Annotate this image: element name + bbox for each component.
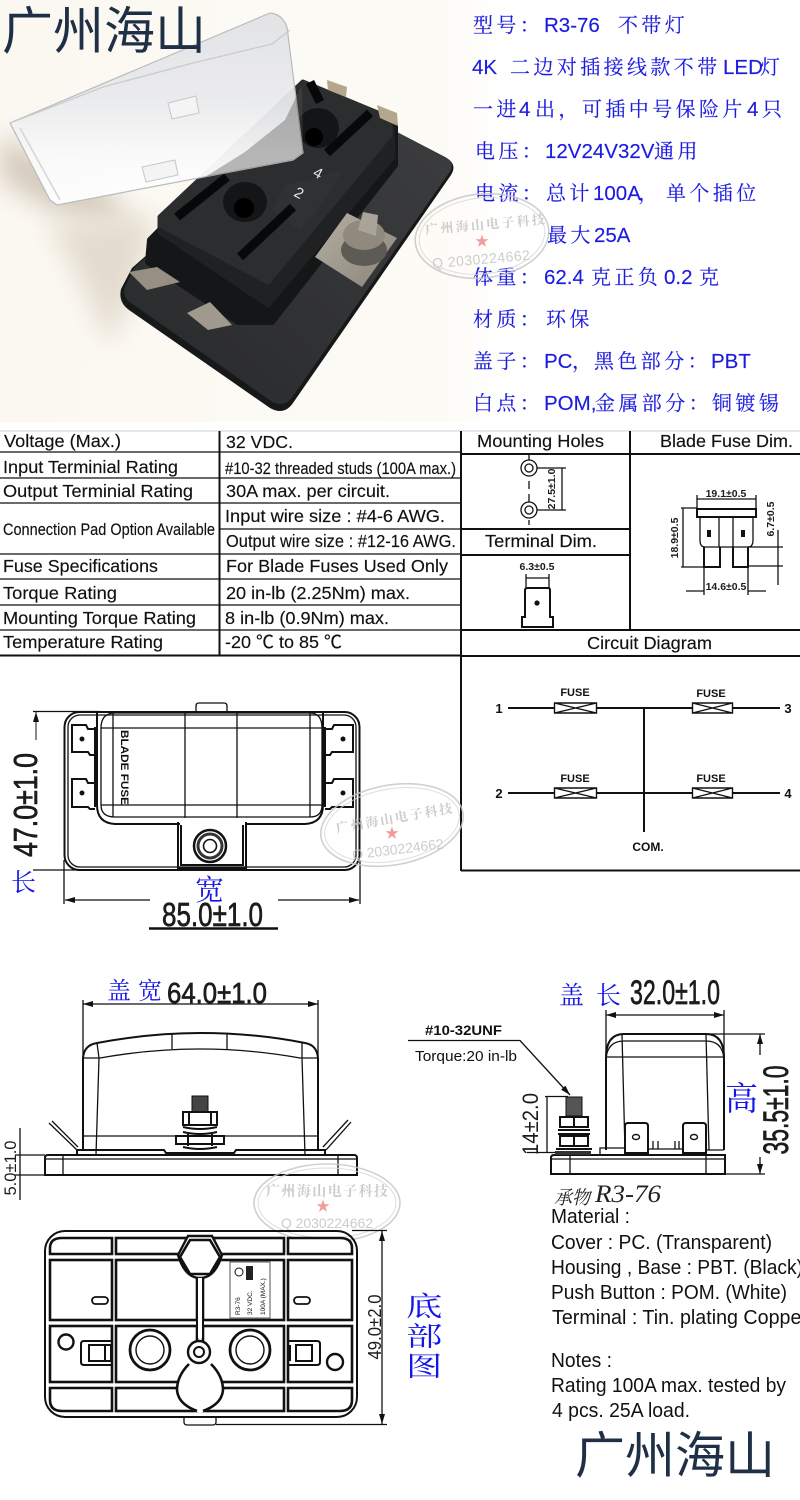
side view labels and dimensions: 高 bbox=[725, 1081, 758, 1118]
product specification text: PC bbox=[544, 350, 573, 373]
materials and notes bbox=[551, 1206, 800, 1422]
front view dimensions: 5.0±1.0 bbox=[1, 1140, 20, 1196]
mounting holes diagram: 27.5±1.0 bbox=[546, 468, 558, 509]
product specification text: 黑色部分： bbox=[594, 350, 711, 373]
front view drawing bbox=[45, 1033, 357, 1175]
product specification text: 62.4 bbox=[544, 266, 584, 289]
product specification text: 铜镀锡 bbox=[712, 392, 782, 415]
stud box bbox=[178, 822, 246, 868]
stud callout bbox=[408, 1022, 570, 1095]
right column values: Input wire size : #4-6 AWG. bbox=[225, 506, 445, 526]
right column values: -20 ℃ to 85 ℃ bbox=[225, 632, 342, 652]
stud callout: #10-32UNF bbox=[425, 1022, 502, 1038]
fuse slots and mounting holes bbox=[177, 82, 370, 257]
left column labels bbox=[3, 431, 215, 652]
top view dimensions: 宽 bbox=[195, 874, 224, 907]
handwritten model note: R3-76 bbox=[594, 1181, 662, 1208]
table headers right: Blade Fuse Dim. bbox=[660, 431, 793, 451]
blade fuse dimension diagram: 14.6±0.5 bbox=[706, 581, 747, 593]
materials and notes: Notes : bbox=[551, 1350, 612, 1372]
product specification text: 金属部分： bbox=[595, 392, 712, 415]
product specification text: 100A bbox=[593, 182, 641, 205]
right column values bbox=[225, 432, 456, 652]
blade fuse dimension diagram: 19.1±0.5 bbox=[706, 488, 747, 500]
transparent cover bbox=[10, 13, 303, 205]
terminals bbox=[72, 725, 353, 809]
circuit labels: 4 bbox=[784, 786, 792, 801]
blade fuse dimension diagram: 6.7±0.5 bbox=[765, 501, 777, 536]
left column labels: Mounting Torque Rating bbox=[3, 608, 196, 628]
front view dimensions: 64.0±1.0 bbox=[167, 978, 267, 1010]
spade terminals bbox=[129, 267, 180, 290]
rating label: 32 VDC. bbox=[247, 1290, 254, 1315]
brand title bottom: 广州海山 bbox=[575, 1428, 775, 1484]
product specification text: 12V24V32V bbox=[545, 140, 655, 163]
materials and notes: Cover : PC. (Transparent) bbox=[551, 1232, 772, 1254]
left column labels: Connection Pad Option Available bbox=[3, 521, 215, 539]
terminal dimension diagram: 6.3±0.5 bbox=[520, 561, 555, 573]
side view labels and dimensions: 盖长 bbox=[559, 982, 621, 1010]
bottom view drawing bbox=[45, 1231, 357, 1425]
base bbox=[45, 1155, 357, 1175]
circuit labels: FUSE bbox=[560, 687, 590, 699]
circuit numbers: 2 bbox=[291, 184, 306, 203]
right column values: 30A max. per circuit. bbox=[226, 481, 390, 501]
product specification text: LED bbox=[723, 56, 763, 79]
product specification text: PBT bbox=[711, 350, 751, 373]
materials and notes: 4 pcs. 25A load. bbox=[552, 1400, 690, 1422]
blade fuse dimension diagram: 18.9±0.5 bbox=[669, 517, 681, 558]
specification table bbox=[0, 431, 800, 871]
bottom view dimensions: 部 bbox=[406, 1322, 442, 1352]
product specification text: 4 bbox=[519, 98, 530, 121]
product specification text: 型号： bbox=[473, 14, 543, 37]
product specification text: ， bbox=[572, 351, 595, 373]
rating label: R3-76 bbox=[235, 1297, 242, 1315]
stud plate and nut bbox=[315, 213, 397, 287]
bottom view dimensions bbox=[216, 1230, 442, 1424]
circuit labels: 1 bbox=[495, 701, 503, 716]
stud callout: Torque:20 in-lb bbox=[415, 1049, 517, 1065]
left column labels: Fuse Specifications bbox=[3, 556, 158, 576]
product specification text: POM, bbox=[544, 392, 596, 415]
table headers right: Mounting Holes bbox=[477, 431, 604, 451]
watermark stamp middle: ★ bbox=[385, 825, 399, 841]
watermark stamp top: Q 2030224662 bbox=[431, 247, 531, 271]
left column labels: Output Terminial Rating bbox=[3, 481, 193, 501]
product specification text: 出， bbox=[535, 98, 582, 121]
left column labels: Voltage (Max.) bbox=[4, 431, 121, 451]
circuit diagram bbox=[495, 687, 792, 854]
front view dimensions: 盖宽 bbox=[107, 978, 162, 1005]
handwritten model note bbox=[554, 1181, 662, 1209]
right column values: 20 in-lb (2.25Nm) max. bbox=[226, 583, 410, 603]
top view drawing bbox=[64, 703, 360, 870]
top view dimensions bbox=[7, 712, 360, 933]
terminal dimension diagram bbox=[520, 561, 555, 627]
ribs bbox=[50, 1238, 352, 1411]
watermark stamp top: ★ bbox=[475, 233, 489, 249]
left column labels: Torque Rating bbox=[3, 583, 117, 603]
product specification text: 0.2 bbox=[664, 266, 692, 289]
materials and notes: Material : bbox=[551, 1206, 630, 1228]
product photo: 4 bbox=[310, 164, 325, 183]
product specification text: 克正负 bbox=[591, 266, 661, 289]
product specification text: 克 bbox=[699, 266, 722, 289]
watermark stamp middle bbox=[314, 773, 470, 877]
watermark stamp bottom: 广州海山电子科技 bbox=[266, 1183, 388, 1200]
cover outline bbox=[97, 712, 323, 824]
handwritten model note: 承物 bbox=[554, 1188, 593, 1209]
stud and nuts bbox=[176, 1096, 224, 1149]
product specification text: 可插中号保险片 bbox=[582, 98, 746, 121]
product specification text bbox=[472, 14, 785, 415]
circuit labels: 3 bbox=[784, 701, 792, 716]
right column values: For Blade Fuses Used Only bbox=[226, 556, 448, 576]
mounting holes diagram bbox=[521, 455, 566, 525]
fuse block housing bbox=[148, 85, 395, 322]
materials and notes: Rating 100A max. tested by bbox=[551, 1375, 786, 1397]
mounting rings bbox=[130, 1330, 170, 1370]
circuit labels bbox=[495, 687, 792, 854]
product specification text: 环保 bbox=[546, 308, 593, 331]
product specification text: 二边对插接线款不带 bbox=[510, 56, 721, 79]
hexagon bbox=[178, 1236, 222, 1278]
fuse symbols bbox=[554, 703, 732, 798]
table headers right bbox=[477, 431, 793, 653]
product specification text: 4 bbox=[747, 98, 758, 121]
product specification text: 材质： bbox=[473, 308, 543, 331]
watermark stamp bottom: Q 2030224662 bbox=[281, 1215, 373, 1231]
right column values: #10-32 threaded studs (100A max.) bbox=[225, 460, 456, 478]
product specification text: 白点： bbox=[473, 392, 543, 415]
product specification text: ， bbox=[638, 183, 661, 205]
left column labels: Temperature Rating bbox=[3, 632, 163, 652]
watermark stamp bottom: ★ bbox=[316, 1198, 330, 1214]
product specification text: 盖子： bbox=[473, 350, 543, 373]
circuit labels: FUSE bbox=[560, 773, 590, 785]
product specification text: 一进 bbox=[473, 98, 520, 121]
right column values: 8 in-lb (0.9Nm) max. bbox=[225, 608, 389, 628]
top view dimensions: 85.0±1.0 bbox=[162, 896, 263, 933]
circuit labels: FUSE bbox=[696, 773, 726, 785]
watermark stamp middle: 广州海山电子科技 bbox=[335, 801, 453, 836]
left column labels: Input Terminial Rating bbox=[3, 457, 178, 477]
circuit labels: COM. bbox=[632, 840, 664, 854]
keyhole bbox=[177, 1364, 223, 1411]
rating label: 100A (MAX.) bbox=[260, 1278, 267, 1315]
top view dimensions: 长 bbox=[11, 869, 36, 897]
product specification text: 4K bbox=[472, 56, 497, 79]
side view labels and dimensions: 14±2.0 bbox=[518, 1093, 543, 1155]
side view labels and dimensions bbox=[518, 974, 796, 1174]
product photo bbox=[0, 0, 800, 422]
circuit labels: FUSE bbox=[696, 688, 726, 700]
terminal wings bbox=[49, 1120, 351, 1150]
product specification text: 电压： bbox=[475, 140, 545, 163]
blade fuse dimension diagram bbox=[669, 488, 783, 595]
side stud bbox=[555, 1097, 592, 1155]
side base bbox=[551, 1155, 725, 1174]
slider windows bbox=[81, 1341, 112, 1365]
product specification text: 25A bbox=[594, 224, 631, 247]
brand title top: 广州海山 bbox=[2, 3, 206, 60]
right column values: Output wire size : #12-16 AWG. bbox=[226, 531, 456, 551]
bottom view dimensions: 49.0±2.0 bbox=[365, 1294, 385, 1360]
front view dimensions bbox=[1, 978, 318, 1200]
product specification text: 只 bbox=[762, 99, 785, 121]
product specification text: 通用 bbox=[654, 140, 701, 163]
watermark stamp middle: Q 2030224662 bbox=[351, 835, 445, 863]
product specification text: 灯 bbox=[760, 56, 783, 79]
right column values: 32 VDC. bbox=[226, 432, 293, 452]
side terminals bbox=[625, 1123, 648, 1153]
rating label bbox=[230, 1262, 270, 1318]
materials and notes: Push Button : POM. (White) bbox=[551, 1282, 787, 1304]
product specification text: 体重： bbox=[473, 266, 543, 289]
watermark stamp bottom bbox=[254, 1164, 400, 1242]
product specification text: R3-76 bbox=[544, 14, 600, 37]
watermark stamp top bbox=[411, 187, 553, 285]
bottom view dimensions: 底 bbox=[406, 1292, 442, 1322]
circuit labels: 2 bbox=[495, 786, 503, 801]
product specification text: 电流： bbox=[475, 182, 545, 205]
top view dimensions: 47.0±1.0 bbox=[7, 753, 44, 857]
product specification text: 单个插位 bbox=[666, 182, 760, 205]
side view drawing bbox=[551, 1034, 725, 1174]
product specification text: 最大 bbox=[547, 224, 594, 247]
cover print: BLADE FUSE bbox=[118, 730, 130, 805]
bottom view dimensions: 图 bbox=[406, 1352, 442, 1382]
side view labels and dimensions: 35.5±1.0 bbox=[757, 1066, 796, 1154]
side view labels and dimensions: 32.0±1.0 bbox=[630, 974, 720, 1012]
product specification text: 不带灯 bbox=[618, 14, 688, 37]
table headers right: Circuit Diagram bbox=[587, 633, 712, 653]
watermark stamp top: 广州海山电子科技 bbox=[425, 212, 545, 237]
product specification text: 总计 bbox=[546, 182, 593, 205]
table headers right: Terminal Dim. bbox=[485, 531, 597, 551]
base plate bbox=[120, 120, 453, 411]
